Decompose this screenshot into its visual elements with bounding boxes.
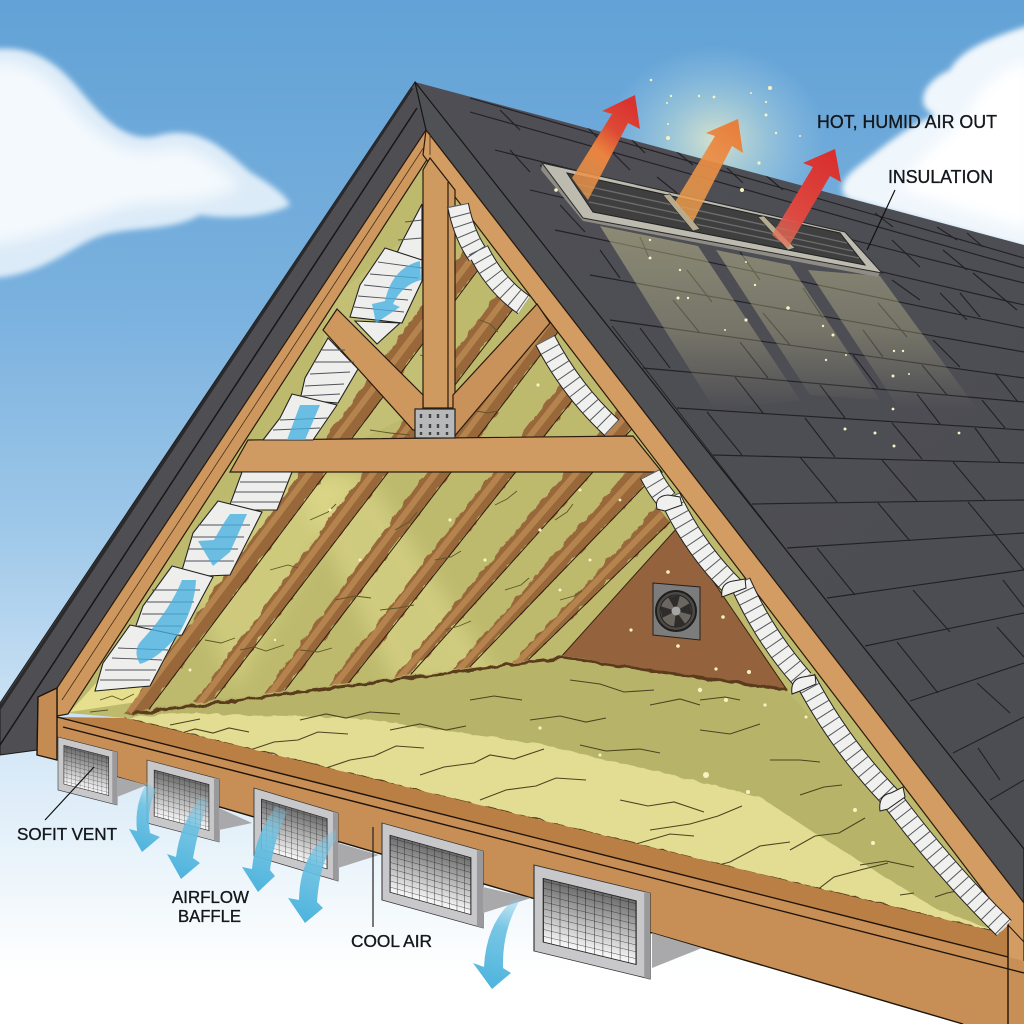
wall insulation batts [70, 210, 670, 716]
insulation crack lines on walls [90, 320, 582, 712]
rafters between insulation [124, 240, 670, 716]
gray soffit wedge 1 [117, 777, 147, 797]
tie beam [230, 436, 662, 472]
sun glow above vent [605, 45, 825, 235]
king post [423, 158, 455, 408]
leader line: soffit vent [45, 767, 94, 820]
attic interior [68, 155, 1008, 935]
gray soffit wedge 5 [652, 933, 702, 968]
blue flow arrows inside baffles [136, 261, 421, 664]
arrow: hot air out right [772, 149, 841, 248]
vent frame [541, 165, 880, 277]
arrow: hot air out left [572, 95, 640, 200]
gray soffit wedge 2 [219, 808, 252, 830]
leader line: cool air [372, 827, 374, 927]
gable triangle background insulation [68, 155, 1008, 933]
floor insulation crack lines [170, 680, 957, 905]
cloud: left [0, 48, 290, 278]
label: soffit vent: SOFIT VENT [17, 824, 117, 844]
airflow baffles left side [95, 204, 422, 691]
ridge vent with louvers [541, 163, 882, 277]
floor insulation [125, 656, 1003, 935]
vent 2 [147, 760, 219, 842]
vent 5 [534, 865, 650, 979]
cool air arrows [129, 782, 531, 989]
left rafter [57, 130, 430, 716]
right rafter [423, 130, 1024, 965]
roof gable fascia left [0, 82, 426, 755]
gray soffit wedge 3 [338, 843, 379, 868]
roof fascia right [415, 82, 1024, 903]
wall plate front board [37, 688, 1024, 1024]
gray soffit wedge 4 [483, 887, 531, 913]
metal gusset plate [415, 409, 455, 438]
leader line: insulation [867, 190, 895, 250]
vent 1 [58, 737, 117, 805]
label: airflow baffle: BAFFLE [178, 906, 241, 926]
baffle ribs [100, 220, 422, 680]
gable end wall sheathing [560, 528, 787, 690]
left strut [323, 309, 423, 430]
louver slats [567, 173, 865, 265]
label: airflow baffle: AIRFLOW [172, 887, 249, 907]
label: hot humid air out: HOT, HUMID AIR OUT [817, 112, 997, 132]
cloud: right [842, 25, 1024, 250]
vent 3 [254, 788, 338, 881]
wood inner rafter lines [62, 133, 430, 700]
baffle overlap curls [656, 495, 905, 811]
right strut [453, 304, 550, 438]
label: cool air: COOL AIR [351, 931, 432, 951]
vent 4 [382, 823, 483, 928]
particles of moist air [188, 79, 960, 845]
roof surface with shingles [415, 82, 1024, 856]
shingle course and joint lines [470, 98, 1024, 856]
soffit vent grilles [58, 737, 702, 979]
light shafts on roof [600, 226, 985, 420]
arrow: hot air out middle [675, 119, 743, 222]
label: airflow baffle [172, 887, 249, 926]
label: insulation: INSULATION [888, 167, 993, 187]
gable exhaust fan [653, 583, 700, 640]
wood truss framing [57, 130, 1024, 965]
airflow baffles right side [458, 205, 1004, 928]
